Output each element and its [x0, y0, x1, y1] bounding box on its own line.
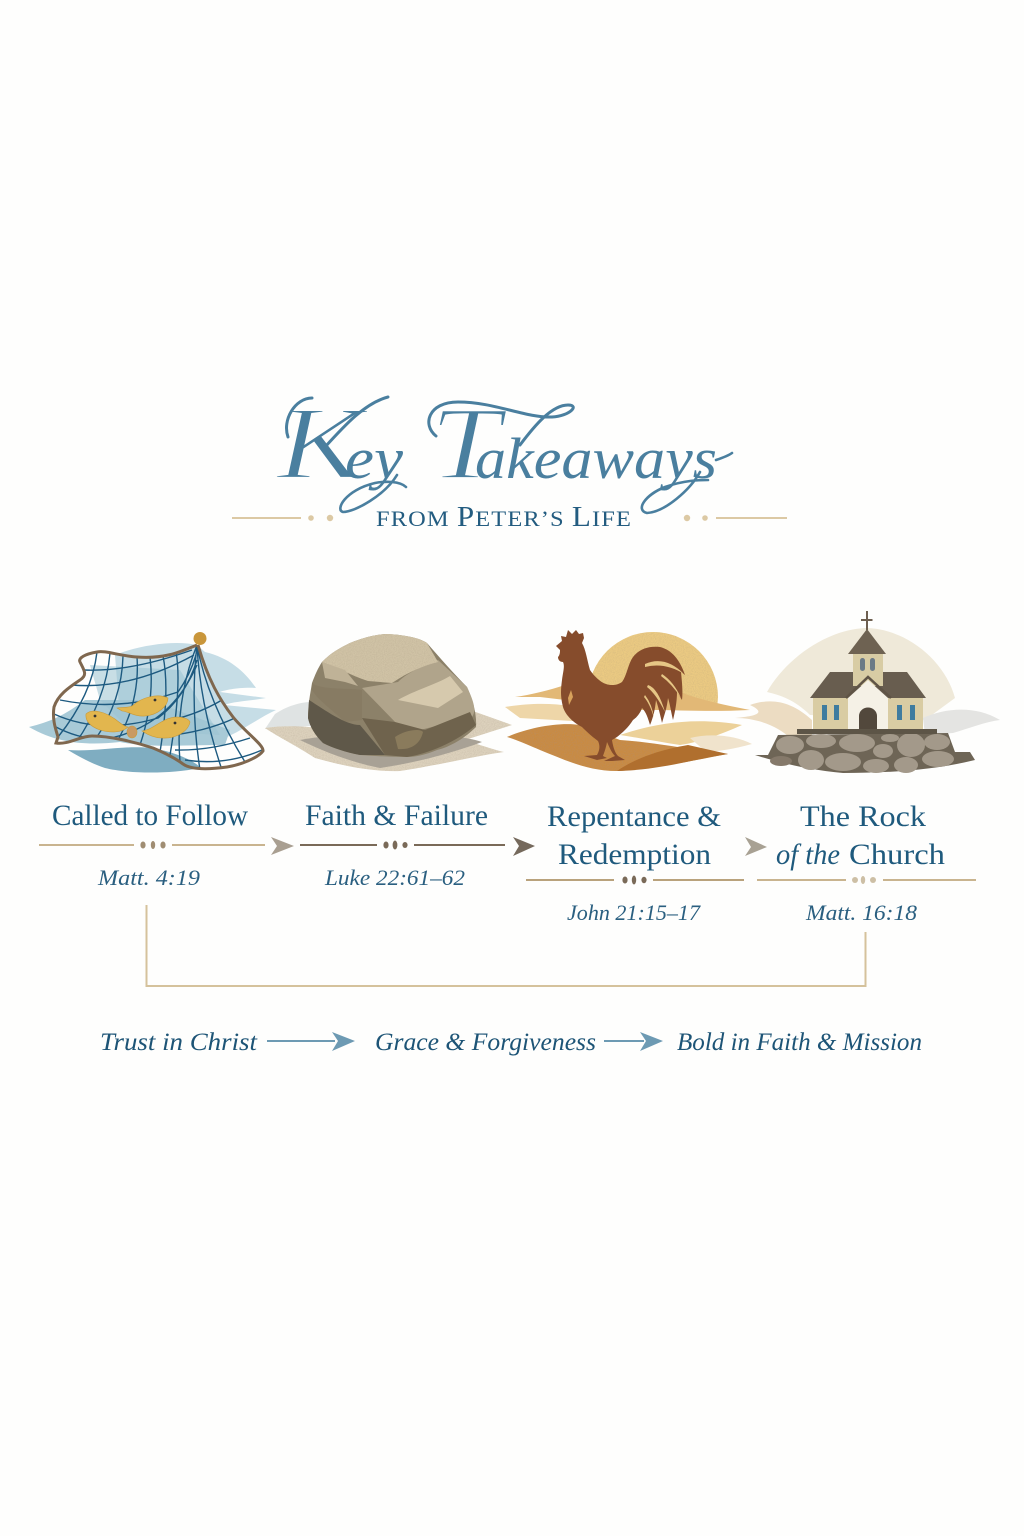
reference: John 21:15–17: [567, 900, 701, 925]
title: Key Takeaways: akeaways: [475, 426, 717, 491]
foundation stones: [770, 733, 954, 773]
arrow 1: [271, 837, 294, 855]
arrow: [267, 1032, 355, 1051]
outcome flow: [100, 1029, 922, 1056]
rock body: [308, 634, 476, 757]
door: [859, 708, 877, 729]
divider: [757, 876, 976, 884]
step 4: [757, 800, 976, 925]
water waves: [29, 643, 276, 773]
reference: Luke 22:61–62: [324, 865, 465, 890]
net rim: [53, 645, 263, 769]
heading: Repentance &: [547, 800, 721, 833]
title: Key Takeaways: T: [430, 386, 507, 501]
step 2: [300, 799, 505, 890]
step 3: [526, 800, 744, 925]
title: Key Takeaways: [275, 386, 732, 513]
platform: [797, 729, 937, 734]
subtitle: FROM PETER’S LIFE: [376, 502, 632, 533]
title: Key Takeaways: K: [275, 386, 369, 501]
center gable: [848, 680, 888, 729]
arrow: [604, 1032, 663, 1051]
step 1: [39, 799, 265, 890]
wing highlight: [568, 690, 573, 705]
tower windows: [860, 658, 875, 671]
hills: [505, 685, 752, 771]
cloud: [923, 710, 1000, 735]
halo: [767, 628, 955, 720]
step 3: Redemption: [558, 838, 711, 871]
spire: [848, 629, 886, 654]
outcome: Bold in Faith & Mission: Bold in Faith & Mission: [677, 1029, 922, 1056]
rock foundation: [755, 733, 975, 773]
icon: rooster and sun: [505, 630, 752, 771]
main roof: [810, 672, 926, 698]
net mesh: [54, 645, 262, 770]
sand wave: [735, 701, 812, 738]
title ornament left: [232, 515, 333, 521]
title: Key Takeaways: ey: [345, 426, 403, 491]
icon: church on the rock: [735, 611, 1000, 773]
tower: [853, 654, 883, 686]
side windows: [822, 705, 915, 720]
title block: [232, 386, 787, 533]
title ornament right: [684, 515, 787, 521]
outcome: Trust in Christ: Trust in Christ: [100, 1029, 258, 1056]
tail feather highlights: [644, 661, 684, 718]
arrow 3: [745, 837, 767, 856]
step 4: of the: [776, 838, 840, 871]
rock light top facet: [322, 634, 438, 683]
reference: Matt. 4:19: [97, 865, 200, 890]
divider: [526, 876, 744, 884]
step 4: Church: [849, 838, 945, 871]
fish: [86, 696, 190, 738]
icon: fishing net with fish: [29, 632, 276, 773]
heading: Called to Follow: [52, 799, 248, 832]
rooster silhouette: [556, 630, 685, 761]
heading: Faith & Failure: [305, 799, 488, 832]
rock dark lower: [308, 700, 385, 755]
cross: [861, 611, 872, 630]
arrow 2: [513, 837, 535, 856]
walls: [813, 698, 923, 729]
reference: Matt. 16:18: [805, 900, 917, 925]
rock mid facets: [362, 660, 474, 730]
connector bracket: [146, 905, 866, 986]
divider: [300, 840, 505, 850]
sand base: [265, 702, 512, 771]
heading: The Rock: [800, 800, 926, 833]
icon: rock: [265, 634, 512, 771]
divider: [39, 841, 265, 849]
outcome: Grace & Forgiveness: Grace & Forgiveness: [375, 1029, 596, 1056]
sun: [588, 632, 718, 710]
net float: [194, 632, 206, 645]
